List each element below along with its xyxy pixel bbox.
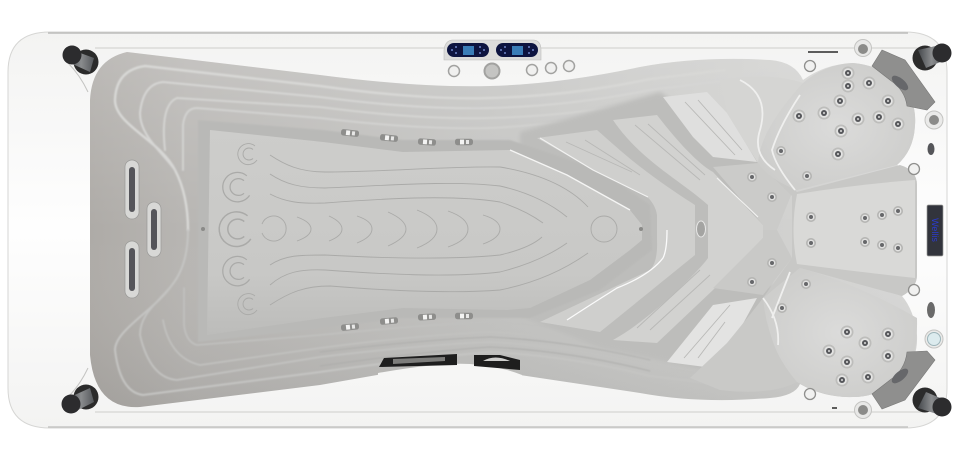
rim fittings	[804, 40, 943, 418]
corner post top right	[912, 44, 952, 70]
top control panels	[444, 40, 541, 60]
spa display panel	[927, 205, 943, 256]
spa display panel: Wellis	[930, 218, 940, 242]
deep end groove	[520, 92, 772, 372]
corner post top left	[62, 46, 98, 74]
hot tub jets	[747, 66, 904, 386]
bottom step contours	[115, 230, 750, 395]
hot tub headrest top	[872, 50, 935, 110]
floor lane curves	[262, 155, 617, 305]
side swim jets	[341, 129, 473, 331]
control buttons	[448, 60, 574, 78]
floor swim rings	[201, 144, 643, 315]
left wall suction grilles	[125, 160, 161, 298]
hot tub headrest bottom	[872, 351, 935, 409]
corner post bottom left	[62, 384, 98, 414]
deep end steps	[537, 92, 792, 368]
hot tub seats	[690, 63, 917, 397]
corner post bottom right	[912, 388, 952, 416]
top step contours	[115, 66, 730, 230]
bottom skimmer openings	[378, 354, 522, 377]
pool basin	[90, 52, 917, 407]
pool floor	[62, 40, 952, 418]
